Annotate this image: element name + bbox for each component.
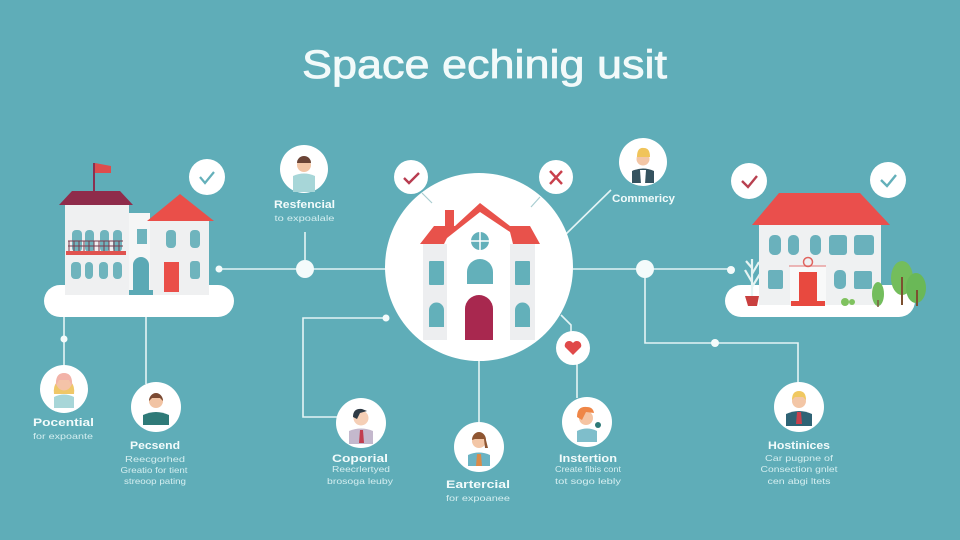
label: pecsend: Pecsend (130, 440, 180, 452)
label: instertion (555, 453, 622, 486)
person: instertion (562, 397, 612, 447)
label: eartercial: for expoanee (446, 493, 510, 503)
teal door (133, 257, 149, 290)
label: commericy: Commericy (612, 193, 676, 205)
door and portico (790, 266, 826, 302)
label: pocential: Pocential (33, 417, 94, 429)
label: hostinices: Car pugpne of (765, 453, 834, 463)
walls (65, 205, 129, 295)
label: hostinices (760, 440, 838, 486)
person: residencial (280, 145, 328, 193)
roof (445, 210, 454, 232)
label: pecsend: Greatio for tient (120, 465, 188, 475)
windows (71, 229, 200, 279)
label: residencial: to expoalale (274, 213, 335, 223)
flag (93, 163, 95, 191)
person: commericy (619, 138, 667, 186)
central house circle (385, 173, 573, 361)
label: instertion: Create fibis cont (555, 464, 622, 474)
label: residencial (274, 199, 335, 223)
label: hostinices: cen abgi ltets (768, 476, 830, 486)
windows (768, 235, 874, 289)
check badge left house (189, 159, 225, 195)
roofs (59, 191, 133, 205)
label: pecsend (120, 440, 188, 486)
label: residencial: Resfencial (274, 199, 335, 211)
right house on cloud (725, 193, 926, 317)
label: coporial (327, 453, 394, 486)
label: pecsend: streoop pating (124, 476, 186, 486)
side wings (423, 244, 447, 340)
wall (759, 225, 881, 305)
label: hostinices: Hostinices (768, 440, 830, 452)
person: pecsend (131, 382, 181, 432)
label: coporial: brosoga leuby (327, 476, 394, 486)
central door (465, 295, 493, 340)
bush and trees (841, 298, 849, 306)
person: pocential (40, 365, 88, 413)
left house on cloud (44, 163, 234, 317)
person: coporial (336, 398, 386, 448)
cross badge center right (539, 160, 573, 194)
label: pocential (33, 417, 94, 441)
cloud platform (725, 285, 915, 317)
connector lines (64, 190, 798, 425)
cloud platform (44, 285, 234, 317)
title: Space echinig usit (302, 43, 667, 87)
check badge right house right (870, 162, 906, 198)
person: hostinices (774, 382, 824, 432)
badge ticks (422, 193, 540, 207)
balcony (68, 241, 123, 246)
label: pocential: for expoante (33, 431, 93, 441)
label: instertion: Instertion (559, 453, 617, 465)
check badge center left (394, 160, 428, 194)
label: instertion: tot sogo lebly (555, 476, 622, 486)
label: eartercial (446, 479, 510, 503)
roof (752, 193, 890, 225)
red door (164, 262, 179, 292)
potted plant (745, 259, 760, 296)
heart badge (556, 331, 590, 365)
connector nodes (60, 260, 735, 347)
label: coporial: Reecrlertyed (332, 464, 390, 474)
person: eartercial (454, 422, 504, 472)
label: pecsend: Reecgorhed (125, 454, 185, 464)
label: eartercial: Eartercial (446, 479, 510, 491)
check badge right house left (731, 163, 767, 199)
label: hostinices: Consection gnlet (760, 464, 838, 474)
label: coporial: Coporial (332, 453, 388, 465)
central windows (429, 232, 530, 327)
